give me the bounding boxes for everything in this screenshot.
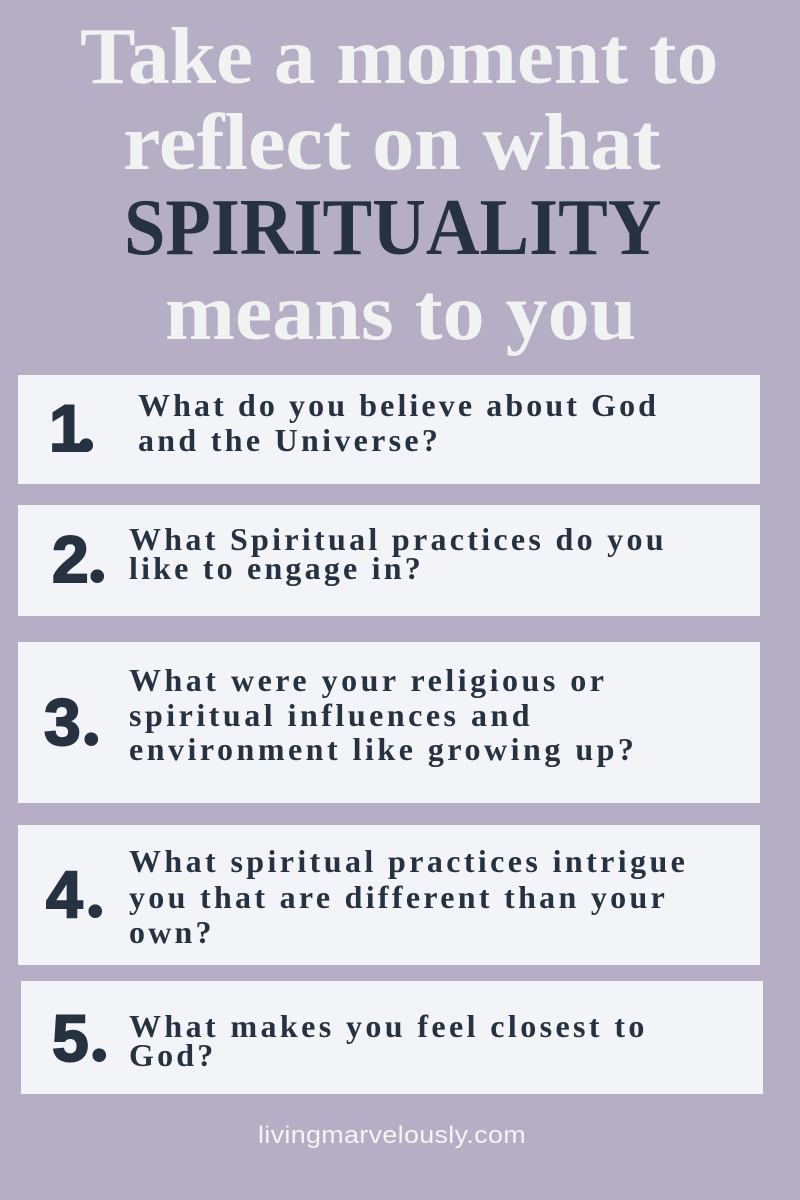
title: SPIRITUALITY <box>124 184 661 272</box>
panel: question 1 <box>18 375 760 484</box>
panel: question 3: environment like growing up? <box>129 731 637 767</box>
panel: question 5: 5. <box>52 987 110 1080</box>
panel: question 1: and the Universe? <box>138 422 441 458</box>
title: means to you <box>165 269 636 357</box>
panel: question 2 <box>18 505 760 616</box>
panel: question 5: What makes you feel closest to <box>129 1008 648 1044</box>
panel: question 5: God? <box>129 1037 216 1073</box>
panel: question 1: 1. <box>49 377 97 470</box>
panel: question 4 <box>18 825 760 965</box>
panel: question 1: What do you believe about God <box>138 387 659 423</box>
panel: question 2: like to engage in? <box>129 550 424 586</box>
panel: question 3: What were your religious or <box>129 662 607 698</box>
panel: question 4: What spiritual practices intrigue <box>129 843 688 879</box>
panel: question 4: you that are different than your <box>129 878 668 914</box>
panel: question 4: 4. <box>46 843 106 936</box>
title: reflect on what <box>123 99 661 187</box>
website footer: livingmarvelously.com <box>258 1122 526 1149</box>
panel: question 4: own? <box>129 914 215 950</box>
title: Take a moment to <box>80 13 718 101</box>
panel: question 3: spiritual influences and <box>129 696 533 732</box>
panel: question 2: 2. <box>52 508 108 601</box>
title <box>80 13 718 357</box>
panel: question 2: What Spiritual practices do you <box>129 521 667 557</box>
panel: question 3 <box>18 642 760 803</box>
panel: question 3: 3. <box>44 671 102 764</box>
panel: question 5 <box>21 981 763 1094</box>
